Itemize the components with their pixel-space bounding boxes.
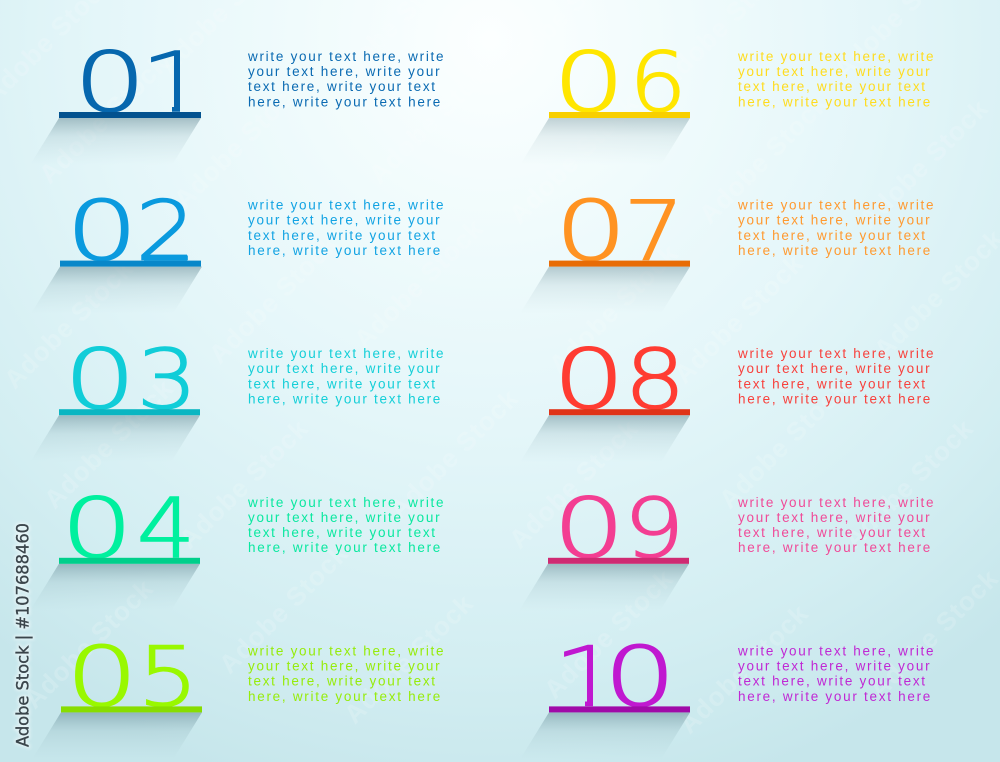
text block 01: your text here, write your [248,64,441,79]
watermark pattern: Adobe Stock [538,563,679,704]
text block 04: text here, write your text [248,525,437,540]
text block 07: text here, write your text [738,228,927,243]
shelf 10 [549,706,690,712]
watermark pattern: Adobe Stock [203,228,344,369]
shelf 02 [60,261,201,267]
text block 05: here, write your text here [248,689,442,704]
watermark pattern: Adobe Stock [168,73,309,214]
text block 08: your text here, write your [738,361,931,376]
watermark pattern: Adobe Stock [838,413,979,554]
number 07: 0 [555,184,627,280]
item 02 [31,184,445,314]
item 01 [40,49,443,152]
text block 01: text here, write your text [248,79,437,94]
number 06 [553,35,687,131]
stock id label: Adobe Stock | #107688460 [14,523,34,747]
shelf shadow 01 [30,118,201,165]
shelf 03 [59,409,200,415]
shelf shadow 04 [30,564,200,611]
watermark pattern: Adobe Stock [173,413,314,554]
text block 07: here, write your text here [738,243,932,258]
watermark pattern: Adobe Stock [363,48,504,189]
text block 04: your text here, write your [248,510,441,525]
number 08: 8 [624,333,686,428]
number 09: 9 [623,481,685,577]
number 04: 0 [61,481,133,577]
text block 10: here, write your text here [738,689,932,704]
shelf 08 [549,409,690,415]
watermark pattern: Adobe Stock [693,88,834,229]
number 05: 0 [66,630,138,725]
text block 08: here, write your text here [738,392,932,407]
watermark pattern: Adobe Stock [543,238,684,379]
text block 05: your text here, write your [248,658,441,673]
text block 07: your text here, write your [738,213,931,228]
number 08 [553,333,686,428]
item 10 [532,644,933,742]
number 04: 4 [137,481,195,577]
text block 09: text here, write your text [738,525,927,540]
text block 01: write your text here, write [247,49,445,64]
text block 06: write your text here, write [737,49,935,64]
shelf 06 [549,112,690,118]
number 10 [564,644,666,706]
watermark pattern: Adobe Stock [503,413,644,554]
shelf shadow 09 [519,564,689,611]
text block 03: text here, write your text [248,376,437,391]
number 09 [553,481,685,577]
text block 03: here, write your text here [248,392,442,407]
text block 08: write your text here, write [737,346,935,361]
item 08 [520,333,935,462]
text block 10: text here, write your text [738,674,927,689]
item 04 [30,481,445,611]
shelf shadow 05 [32,712,202,759]
stock id label: Adobe Stock | #107688460 [14,523,34,747]
number 01: 1 [139,35,213,131]
number 06: 6 [629,36,687,131]
text block 10: your text here, write your [738,658,931,673]
text block 02: your text here, write your [248,213,441,228]
watermark pattern: Adobe Stock [38,373,179,514]
text block 02: here, write your text here [248,243,442,258]
watermark pattern: Adobe Stock [853,93,994,234]
text block 10: write your text here, write [737,643,935,658]
number 01 [83,49,180,112]
item 09 [519,481,935,611]
shelf 04 [59,558,200,564]
number 09: 0 [553,481,625,577]
number 08: 0 [553,333,625,428]
text block 07: write your text here, write [737,198,935,213]
text block 06: text here, write your text [738,79,927,94]
shelf shadow 10 [520,712,690,759]
text block 03: your text here, write your [248,361,441,376]
text block 05: text here, write your text [248,674,437,689]
text block 03: write your text here, write [247,346,445,361]
text block 02: text here, write your text [248,228,437,243]
number 10: 0 [604,630,676,725]
item 06 [520,35,935,165]
watermark pattern: Adobe Stock [503,88,644,229]
shelf 01 [59,112,201,118]
number 05: 5 [137,630,199,726]
shelf shadow 03 [30,415,200,462]
item 07 [520,184,935,314]
number 05 [66,630,199,726]
watermark pattern: Adobe Stock [0,253,139,394]
number 04 [61,481,195,577]
text block 02: write your text here, write [247,198,445,213]
text block 08: text here, write your text [738,376,927,391]
text block 09: here, write your text here [738,540,932,555]
watermark pattern: Adobe Stock [713,373,854,514]
number 02: 0 [66,184,138,280]
number 07: 7 [623,184,685,280]
text block 05: write your text here, write [247,643,445,658]
number 07 [555,184,685,280]
text block 06: your text here, write your [738,64,931,79]
number 01: 0 [74,35,146,131]
number 02 [66,184,197,280]
text block 01: here, write your text here [248,94,442,109]
number 10: 1 [552,629,626,725]
item 03 [30,333,445,462]
number 03 [64,333,198,428]
text block 09: your text here, write your [738,510,931,525]
shelf shadow 07 [520,267,690,314]
shelf 05 [61,706,202,712]
number 03: 3 [136,333,198,428]
shelf shadow 06 [520,118,690,165]
watermark pattern: Adobe Stock [18,573,159,714]
watermark pattern: Adobe Stock [668,248,809,389]
shelf shadow 08 [520,415,690,462]
text block 09: write your text here, write [737,495,935,510]
shelf 09 [548,558,689,564]
watermark pattern: Adobe Stock [383,383,524,524]
watermark pattern: Adobe Stock [348,213,489,354]
item 05 [32,630,445,759]
watermark pattern: Adobe Stock [673,598,814,739]
number 02: 2 [135,184,197,280]
shelf 07 [549,261,690,267]
text block 06: here, write your text here [738,94,932,109]
text block 04: write your text here, write [247,495,445,510]
number 03: 0 [64,333,136,428]
number 06: 0 [553,35,625,131]
shelf shadow 02 [31,267,202,314]
watermark pattern: Adobe Stock [338,588,479,729]
watermark pattern: Adobe Stock [213,538,354,679]
text block 04: here, write your text here [248,540,442,555]
watermark pattern: Adobe Stock [33,48,174,189]
